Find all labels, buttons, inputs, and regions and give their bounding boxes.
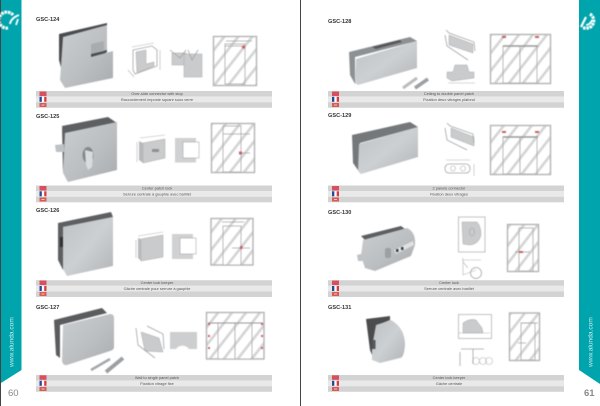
flags: [332, 186, 339, 202]
elevation drawing: GSC-127: [206, 312, 264, 359]
technical sketch: GSC-131 cut-out: [460, 349, 492, 366]
flags: [40, 92, 46, 107]
elevation drawing: GSC-129: [490, 126, 550, 174]
section: GSC-129: [328, 113, 550, 176]
technical sketch: GSC-124 connector: [128, 43, 160, 77]
captions: [124, 280, 190, 291]
section: GSC-125: [36, 114, 254, 182]
product photo: GSC-125: [55, 117, 117, 182]
captions: Center lock keeper: [433, 375, 466, 380]
info bar: GSC-130: [328, 280, 564, 297]
right website text: www.alunda.com: [588, 317, 594, 368]
technical sketch: GSC-127 isometric: [136, 326, 164, 358]
icon: left gear logo: [0, 12, 19, 28]
technical sketch: GSC-128 isometric: [445, 30, 475, 60]
technical sketch: GSC-131 front: [458, 314, 492, 338]
technical sketch: GSC-126 cut-out: [172, 234, 196, 259]
page edge lines: [0, 0, 301, 406]
product photo: GSC-129: [352, 122, 418, 174]
heading: GSC-130: GSC-130: [328, 210, 351, 216]
left page number: 60: [8, 388, 19, 399]
heading: GSC-129: GSC-129: [328, 113, 351, 119]
technical sketch: GSC-129 plan: [445, 160, 474, 176]
technical sketch: GSC-129 isometric: [445, 123, 474, 150]
captions: Gâche centrale pour serrure à gauphle: [124, 286, 190, 291]
elevation drawing: GSC-126: [211, 218, 253, 265]
captions: Gâche centrale: [436, 381, 462, 386]
captions: Wall to single panel patch: [135, 375, 179, 380]
captions: [135, 375, 179, 386]
right page number: 61: [584, 388, 595, 399]
heading: GSC-128: GSC-128: [328, 19, 351, 25]
captions: Center patch lock: [142, 186, 172, 190]
info bar: GSC-124: [36, 91, 272, 108]
section: GSC-126: [36, 208, 253, 276]
info bar: GSC-129: [328, 186, 564, 202]
captions: Fixation deux vitrages: [430, 191, 468, 196]
product photo: GSC-130: [357, 226, 415, 271]
info bar: GSC-125: [36, 186, 272, 202]
product photo: GSC-127: [54, 308, 123, 372]
icon: right gear logo: [581, 14, 594, 28]
heading: GSC-131: GSC-131: [328, 305, 351, 311]
info bar: GSC-128: [328, 91, 564, 108]
heading: GSC-125: GSC-125: [36, 114, 59, 120]
product photo: GSC-126: [58, 212, 113, 276]
flags: [332, 375, 339, 391]
info bar: GSC-127: [36, 375, 272, 392]
captions: Ceiling to double panel patch: [424, 91, 474, 96]
captions: 2 panels connector: [433, 186, 466, 190]
captions: [423, 91, 475, 102]
captions: Serrure centrale avec barillet: [424, 286, 475, 291]
info bar: GSC-131: [328, 375, 564, 392]
elevation drawing: GSC-124: [214, 36, 256, 86]
captions: [424, 280, 475, 291]
captions: [433, 375, 466, 386]
captions: [121, 91, 193, 102]
elevation drawing: GSC-131: [510, 313, 540, 360]
section: GSC-131: [328, 305, 540, 366]
technical sketch: GSC-124 plan views: [170, 50, 202, 77]
flags: [332, 280, 339, 296]
section: GSC-130: [328, 210, 538, 278]
elevation drawing: GSC-130: [508, 224, 538, 272]
captions: Over-side connector with stop: [131, 91, 183, 96]
technical sketch: GSC-126 isometric: [136, 232, 163, 261]
captions: Raccordement imposte square sous verre: [121, 97, 193, 102]
captions: Fixation vitrage fixe: [140, 381, 174, 386]
captions: Serrure centrale à gauphle avec barillet: [123, 191, 192, 196]
flags: [332, 92, 339, 107]
elevation drawing: GSC-125: [212, 124, 254, 172]
technical sketch: GSC-128 plan: [447, 65, 475, 83]
heading: GSC-124: GSC-124: [36, 17, 60, 23]
flags: [40, 186, 46, 202]
heading: GSC-127: GSC-127: [36, 305, 59, 311]
section: GSC-124: [36, 17, 256, 88]
technical sketch: GSC-130 front: [458, 217, 485, 252]
right teal sidebar: [579, 0, 600, 384]
captions: Center lock: [439, 280, 459, 285]
captions: [123, 186, 192, 196]
technical sketch: GSC-130 cut-out: [462, 258, 482, 278]
product photo: GSC-128: [349, 37, 428, 88]
left teal sidebar: [1, 0, 22, 383]
info bar: GSC-126: [36, 280, 272, 297]
captions: [430, 186, 468, 196]
captions: Fixation deux vitrages plafond: [423, 97, 475, 102]
flags: [40, 280, 46, 296]
heading: GSC-126: GSC-126: [36, 208, 59, 214]
product photo: GSC-124: [59, 23, 113, 88]
section: GSC-127: [36, 305, 264, 372]
technical sketch: GSC-125 isometric: [137, 135, 165, 163]
left website text: www.alunda.com: [8, 317, 16, 368]
product photo: GSC-131: [366, 316, 405, 363]
section: GSC-128: [328, 19, 550, 88]
technical sketch: GSC-127 cut-out: [170, 332, 197, 349]
elevation drawing: GSC-128: [490, 34, 550, 84]
flags: [40, 375, 46, 391]
technical sketch: GSC-125 cut-out: [175, 138, 199, 162]
captions: Center lock keeper: [141, 280, 174, 285]
